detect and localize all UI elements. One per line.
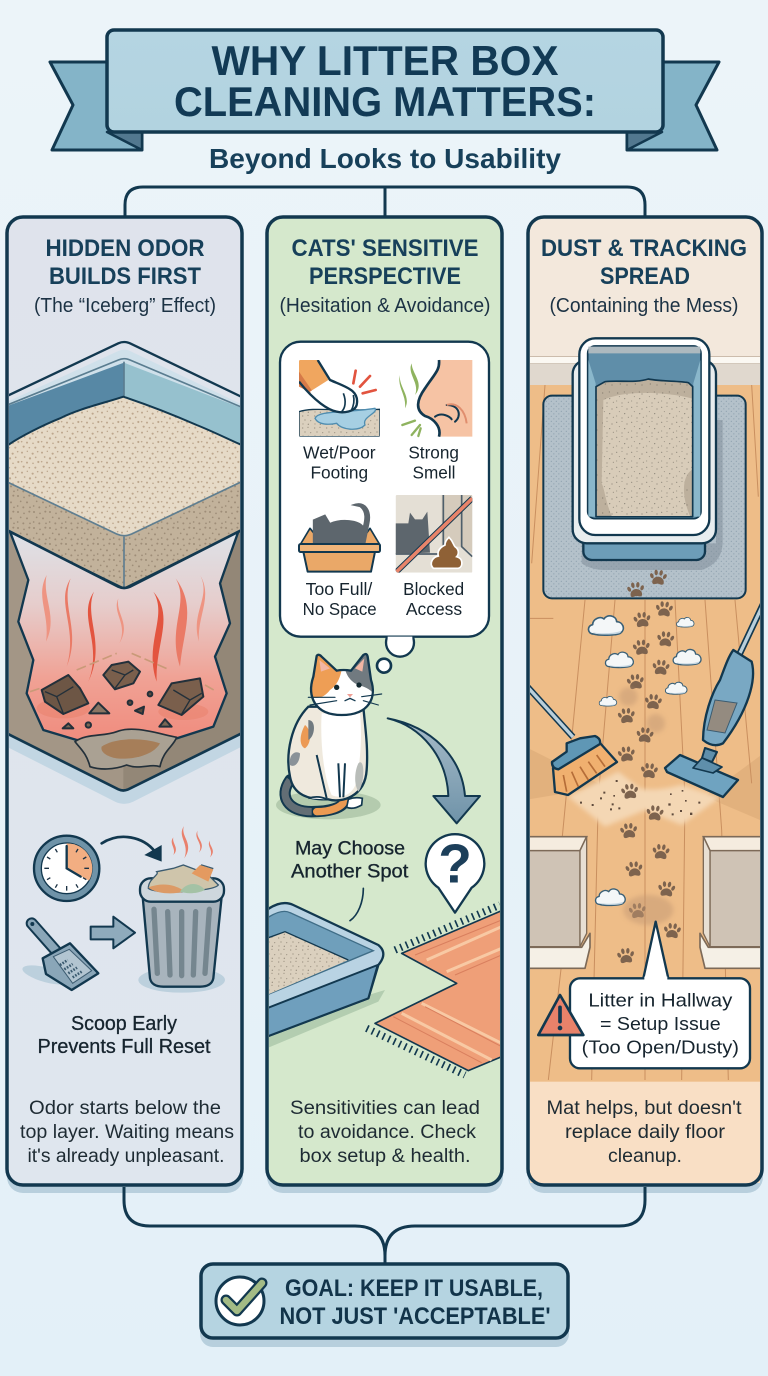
panel: dust and tracking (526, 215, 764, 1193)
odor wisps (42, 575, 205, 682)
lower text band (530, 1080, 760, 1183)
cat face (334, 685, 339, 690)
litter mat (543, 396, 746, 598)
heading: BUILDS FIRST (49, 263, 201, 290)
litter side left (7, 482, 124, 587)
icon labels: No Space (303, 599, 377, 619)
panel background (267, 217, 502, 1185)
goal text: NOT JUST 'ACCEPTABLE' (280, 1303, 550, 1330)
callout: = Setup Issue (600, 1013, 721, 1034)
icon: wet footing (299, 360, 380, 437)
body text: replace daily floor (565, 1122, 726, 1143)
waste clumps (37, 662, 208, 728)
panel background (7, 217, 242, 1185)
box base (583, 530, 705, 560)
title banner (50, 30, 719, 150)
heading: CATS' SENSITIVE (292, 235, 478, 262)
goal box (200, 1264, 569, 1347)
body text: box setup & health. (300, 1146, 470, 1167)
scoop icon (21, 922, 98, 990)
body text: Sensitivities can lead (290, 1098, 480, 1119)
subtitle: Beyond Looks to Usability (209, 143, 561, 174)
icon: too full (299, 504, 380, 572)
caption: scoop early: Prevents Full Reset (38, 1036, 211, 1058)
icon labels: Smell (412, 462, 455, 482)
bubble tail (386, 629, 414, 657)
curved arrow to bin (102, 837, 162, 862)
litter side right (124, 482, 240, 587)
lower cat scene (267, 650, 502, 1075)
title text: WHY LITTER BOX (212, 37, 558, 84)
caption: may choose another spot: Another Spot (291, 861, 409, 882)
warning icon (538, 995, 583, 1035)
trash can (138, 865, 225, 993)
subheading: (The “Iceberg” Effect) (34, 295, 216, 317)
caption: may choose another spot: May Choose (295, 838, 405, 859)
litter box (267, 903, 385, 1048)
body text: cleanup. (608, 1146, 682, 1167)
subheading: (Containing the Mess) (550, 295, 738, 317)
cat legs (317, 755, 345, 798)
icon labels: Footing (310, 462, 368, 482)
icon: check mark (216, 1277, 264, 1325)
bin odor wisps (172, 826, 213, 858)
curved arrow (388, 718, 480, 823)
panel shadow (528, 226, 763, 1193)
caption leader (350, 888, 363, 921)
banner right tail (627, 62, 719, 150)
clock icon (34, 836, 99, 901)
body text: to avoidance. Check (298, 1122, 477, 1143)
icon labels: Wet/Poor (303, 442, 376, 462)
goal text: GOAL: KEEP IT USABLE, (285, 1275, 543, 1302)
panel border (528, 217, 762, 1185)
litter box top view (573, 338, 716, 560)
dashed pit contour (30, 653, 217, 692)
box litter (596, 379, 693, 517)
body text: it's already unpleasant. (28, 1146, 224, 1167)
question bubble: ? (438, 833, 472, 895)
goal face (201, 1264, 568, 1338)
bubble tail dot (377, 659, 391, 673)
goal shadow (200, 1272, 569, 1347)
thought bubble (280, 342, 489, 673)
panel: sensitive perspective (267, 217, 503, 1193)
sweep dust cones (568, 772, 720, 827)
dust clouds (588, 616, 701, 706)
cat (285, 650, 382, 812)
panel: hidden odor (0, 217, 247, 1193)
banner right fold (627, 132, 662, 150)
icon labels: Blocked (403, 579, 464, 599)
panel shadow (7, 226, 243, 1193)
icon: strong smell (399, 360, 472, 437)
panel border (7, 217, 242, 1185)
bubble body (280, 342, 489, 637)
body text: Mat helps, but doesn't (546, 1098, 742, 1119)
cat head (314, 671, 372, 714)
callout (570, 922, 750, 1068)
heading: DUST & TRACKING (541, 235, 747, 262)
cat tail (285, 780, 345, 812)
broom (485, 640, 617, 795)
back wall right (124, 363, 240, 443)
subheading: (Hesitation & Avoidance) (280, 295, 490, 317)
floor scene (530, 337, 760, 1082)
paw trail lower (616, 727, 682, 964)
icon labels: Strong (408, 442, 459, 462)
bottom connector (124, 1187, 645, 1264)
banner face (107, 30, 663, 132)
box interior (588, 346, 701, 519)
lower box walls (7, 527, 240, 791)
top connector (125, 187, 645, 217)
icon labels: Too Full/ (306, 579, 373, 599)
icon labels: Access (406, 599, 462, 619)
body text: Odor starts below the (29, 1098, 221, 1119)
panel background (528, 217, 762, 1185)
body text: top layer. Waiting means (20, 1122, 234, 1143)
paw trail upper (617, 569, 675, 724)
hallway wall left (525, 837, 590, 968)
block arrow (91, 917, 135, 948)
litter top (7, 397, 242, 536)
box rim (579, 338, 709, 535)
heading: SPREAD (600, 263, 690, 290)
title text: CLEANING MATTERS: (174, 78, 596, 125)
cat shadow (276, 791, 381, 819)
iceberg cutaway illustration (0, 342, 247, 804)
callout: (Too Open/Dusty) (582, 1036, 739, 1057)
panel border (267, 217, 502, 1185)
wall and baseboard (530, 356, 760, 385)
hallway wall right (700, 837, 768, 968)
litter box bottom shadow (7, 733, 242, 804)
banner left fold (107, 132, 142, 150)
box outer shell (573, 360, 716, 543)
panel shadow (267, 226, 503, 1193)
urine puddle (75, 729, 177, 769)
icon: blocked access (396, 495, 472, 573)
heading: PERSPECTIVE (309, 263, 461, 290)
cat body (288, 707, 367, 800)
rug (367, 905, 502, 1075)
scoop early illustration (21, 826, 225, 993)
lighter litter surface (602, 393, 692, 516)
box inner rim (0, 342, 247, 399)
hallway cloud and dirt (596, 889, 673, 925)
banner left tail (50, 62, 142, 150)
dust smudges (619, 687, 665, 733)
heading: HIDDEN ODOR (46, 235, 204, 262)
question bubble (426, 833, 484, 913)
box shadow on mat (582, 420, 723, 570)
callout: Litter in Hallway (588, 990, 733, 1011)
hidden pit (10, 532, 238, 740)
wood floor (525, 385, 768, 1082)
icon labels (303, 442, 464, 619)
caption: scoop early: Scoop Early (71, 1013, 177, 1035)
vacuum cleaner (665, 597, 767, 797)
back wall left (9, 363, 124, 444)
